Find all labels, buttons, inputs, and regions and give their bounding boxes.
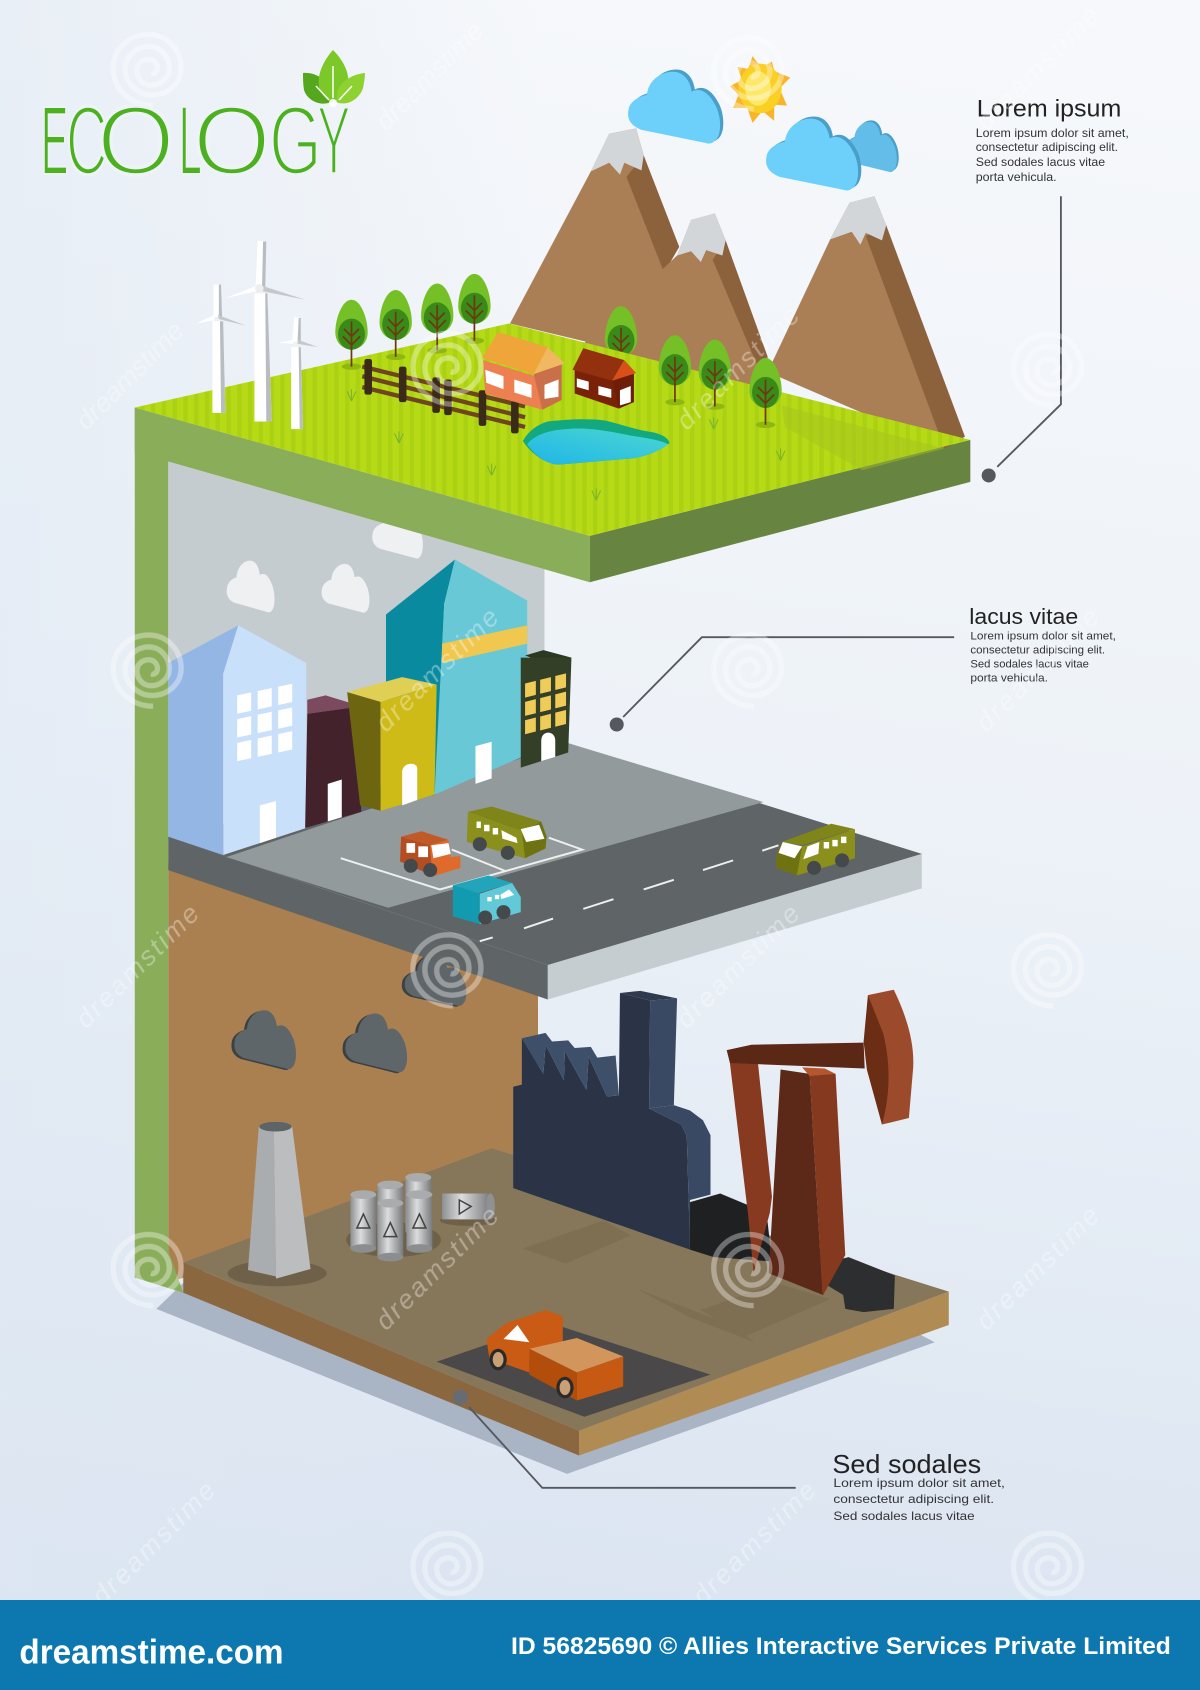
callout body: porta vehicula.: [970, 672, 1048, 684]
turbine: left: [196, 285, 246, 413]
pickup truck: [486, 1310, 623, 1401]
road side light face: [548, 854, 922, 999]
vehicle: olive bus in lot: [467, 806, 547, 860]
watermark words: dreamstime: [369, 15, 489, 136]
title: O: [97, 86, 175, 195]
chimney: [227, 1122, 327, 1286]
pond: [523, 419, 670, 465]
brown back wall: [168, 863, 538, 1283]
title: [41, 86, 351, 195]
mountain: left: [510, 128, 690, 367]
platform shadow: [156, 1283, 935, 1474]
building: maroon block: [305, 695, 361, 828]
sky: blue cloud back: [843, 120, 899, 172]
callout body: consectetur adipiscing elit.: [833, 1492, 994, 1506]
platform right face: [590, 440, 970, 582]
callout dot: [982, 468, 996, 482]
vehicle: orange car: [400, 831, 460, 877]
watermark words: dreamstime: [670, 898, 805, 1034]
watermark words: dreamstime: [69, 898, 205, 1034]
watermark words: dreamstime: [970, 602, 1105, 737]
floor front left face: [183, 1263, 579, 1456]
parking lines and lane dashes: [341, 838, 778, 941]
watermark words: dreamstime: [970, 1200, 1105, 1336]
asphalt pad: [437, 1323, 711, 1417]
pale clouds: [227, 507, 423, 613]
factory: [513, 991, 711, 1250]
sky: blue cloud right: [766, 116, 861, 190]
panel: nature level: [135, 128, 970, 1293]
watermark words: dreamstime: [85, 1475, 221, 1611]
parking lot surface: [226, 743, 763, 908]
grass tufts: [347, 389, 785, 500]
wind turbines: [196, 240, 318, 429]
callout heading: lacus vitae: [969, 604, 1078, 629]
callout: city: [610, 604, 1116, 732]
callout body: Lorem ipsum dolor sit amet,: [833, 1476, 1005, 1490]
title: L: [179, 86, 202, 195]
watermark words: dreamstime: [670, 300, 805, 436]
footer credit: ID 56825690 © Allies Interactive Services Private Limited: [511, 1634, 1171, 1660]
vehicle: olive bus on road: [776, 824, 855, 875]
floor top: [183, 1148, 949, 1431]
grass top: [135, 323, 970, 536]
callout: industry: [453, 1390, 1005, 1523]
callout dot: [453, 1390, 468, 1405]
footer logo: dreamstime.com: [19, 1634, 284, 1672]
turbine: centre: [224, 240, 305, 422]
watermark words: dreamstime: [369, 602, 505, 737]
callout: nature: [976, 96, 1129, 482]
turbine: right: [278, 317, 318, 429]
callout body: porta vehicula.: [976, 170, 1057, 184]
title: Y: [317, 86, 351, 195]
panel: city level: [168, 461, 922, 999]
callout body: Lorem ipsum dolor sit amet,: [976, 126, 1129, 140]
callout body: Lorem ipsum dolor sit amet,: [970, 630, 1116, 642]
callout body: Sed sodales lacus vitae: [970, 658, 1089, 670]
title: E: [41, 86, 68, 195]
ground patches: [523, 1220, 830, 1342]
callout line: [623, 637, 954, 717]
callout body: Sed sodales lacus vitae: [976, 155, 1106, 169]
watermark words: dreamstime: [369, 1200, 505, 1336]
callout body: consectetur adipiscing elit.: [970, 644, 1105, 656]
icon: leaves: [303, 50, 365, 107]
building: light blue tower: [168, 625, 306, 855]
mountains: [510, 128, 965, 449]
title: C: [66, 86, 107, 195]
grass shaded zone: [782, 405, 944, 470]
dark clouds: [231, 954, 466, 1073]
mountain: middle: [582, 213, 768, 399]
tree behind house: [605, 306, 637, 376]
house: orange: [482, 332, 565, 410]
wooden fence: [362, 359, 525, 433]
building: dark green block: [521, 650, 571, 768]
callout heading: Sed sodales: [832, 1451, 981, 1479]
callout body: Sed sodales lacus vitae: [833, 1509, 975, 1523]
watermark words: dreamstime: [69, 315, 190, 436]
panel: industry level: [168, 863, 949, 1456]
green left column: [135, 408, 183, 1293]
platform left face: [135, 408, 590, 582]
grey back wall: [168, 461, 544, 841]
watermark words: dreamstime: [686, 1475, 822, 1611]
title: O: [193, 86, 271, 195]
mountain: right: [768, 196, 965, 449]
sky: blue cloud left: [628, 70, 723, 144]
floor front right face: [579, 1292, 949, 1456]
trees: back row: [335, 274, 491, 370]
trees: front row: [659, 335, 782, 428]
footer bar: [0, 1600, 1200, 1690]
oil pump: [727, 990, 913, 1312]
road surface: [168, 743, 922, 965]
vehicle: teal van: [453, 875, 521, 925]
building: teal tower: [386, 560, 527, 803]
title: G: [269, 86, 322, 195]
callout line: [997, 196, 1061, 467]
callout line: [469, 1407, 796, 1488]
oil barrels: [346, 1173, 441, 1261]
black machine block: [690, 1194, 772, 1261]
building: yellow block: [347, 677, 437, 811]
watermark spirals: [113, 35, 1081, 1604]
tipped barrel: [440, 1194, 496, 1226]
house: red: [573, 348, 636, 409]
watermark words: dreamstime: [970, 0, 1105, 136]
callout body: consectetur adipiscing elit.: [976, 140, 1118, 154]
sky: sun: [730, 56, 790, 123]
road left face: [168, 837, 548, 999]
callout heading: Lorem ipsum: [977, 96, 1121, 122]
callout dot: [610, 718, 624, 732]
